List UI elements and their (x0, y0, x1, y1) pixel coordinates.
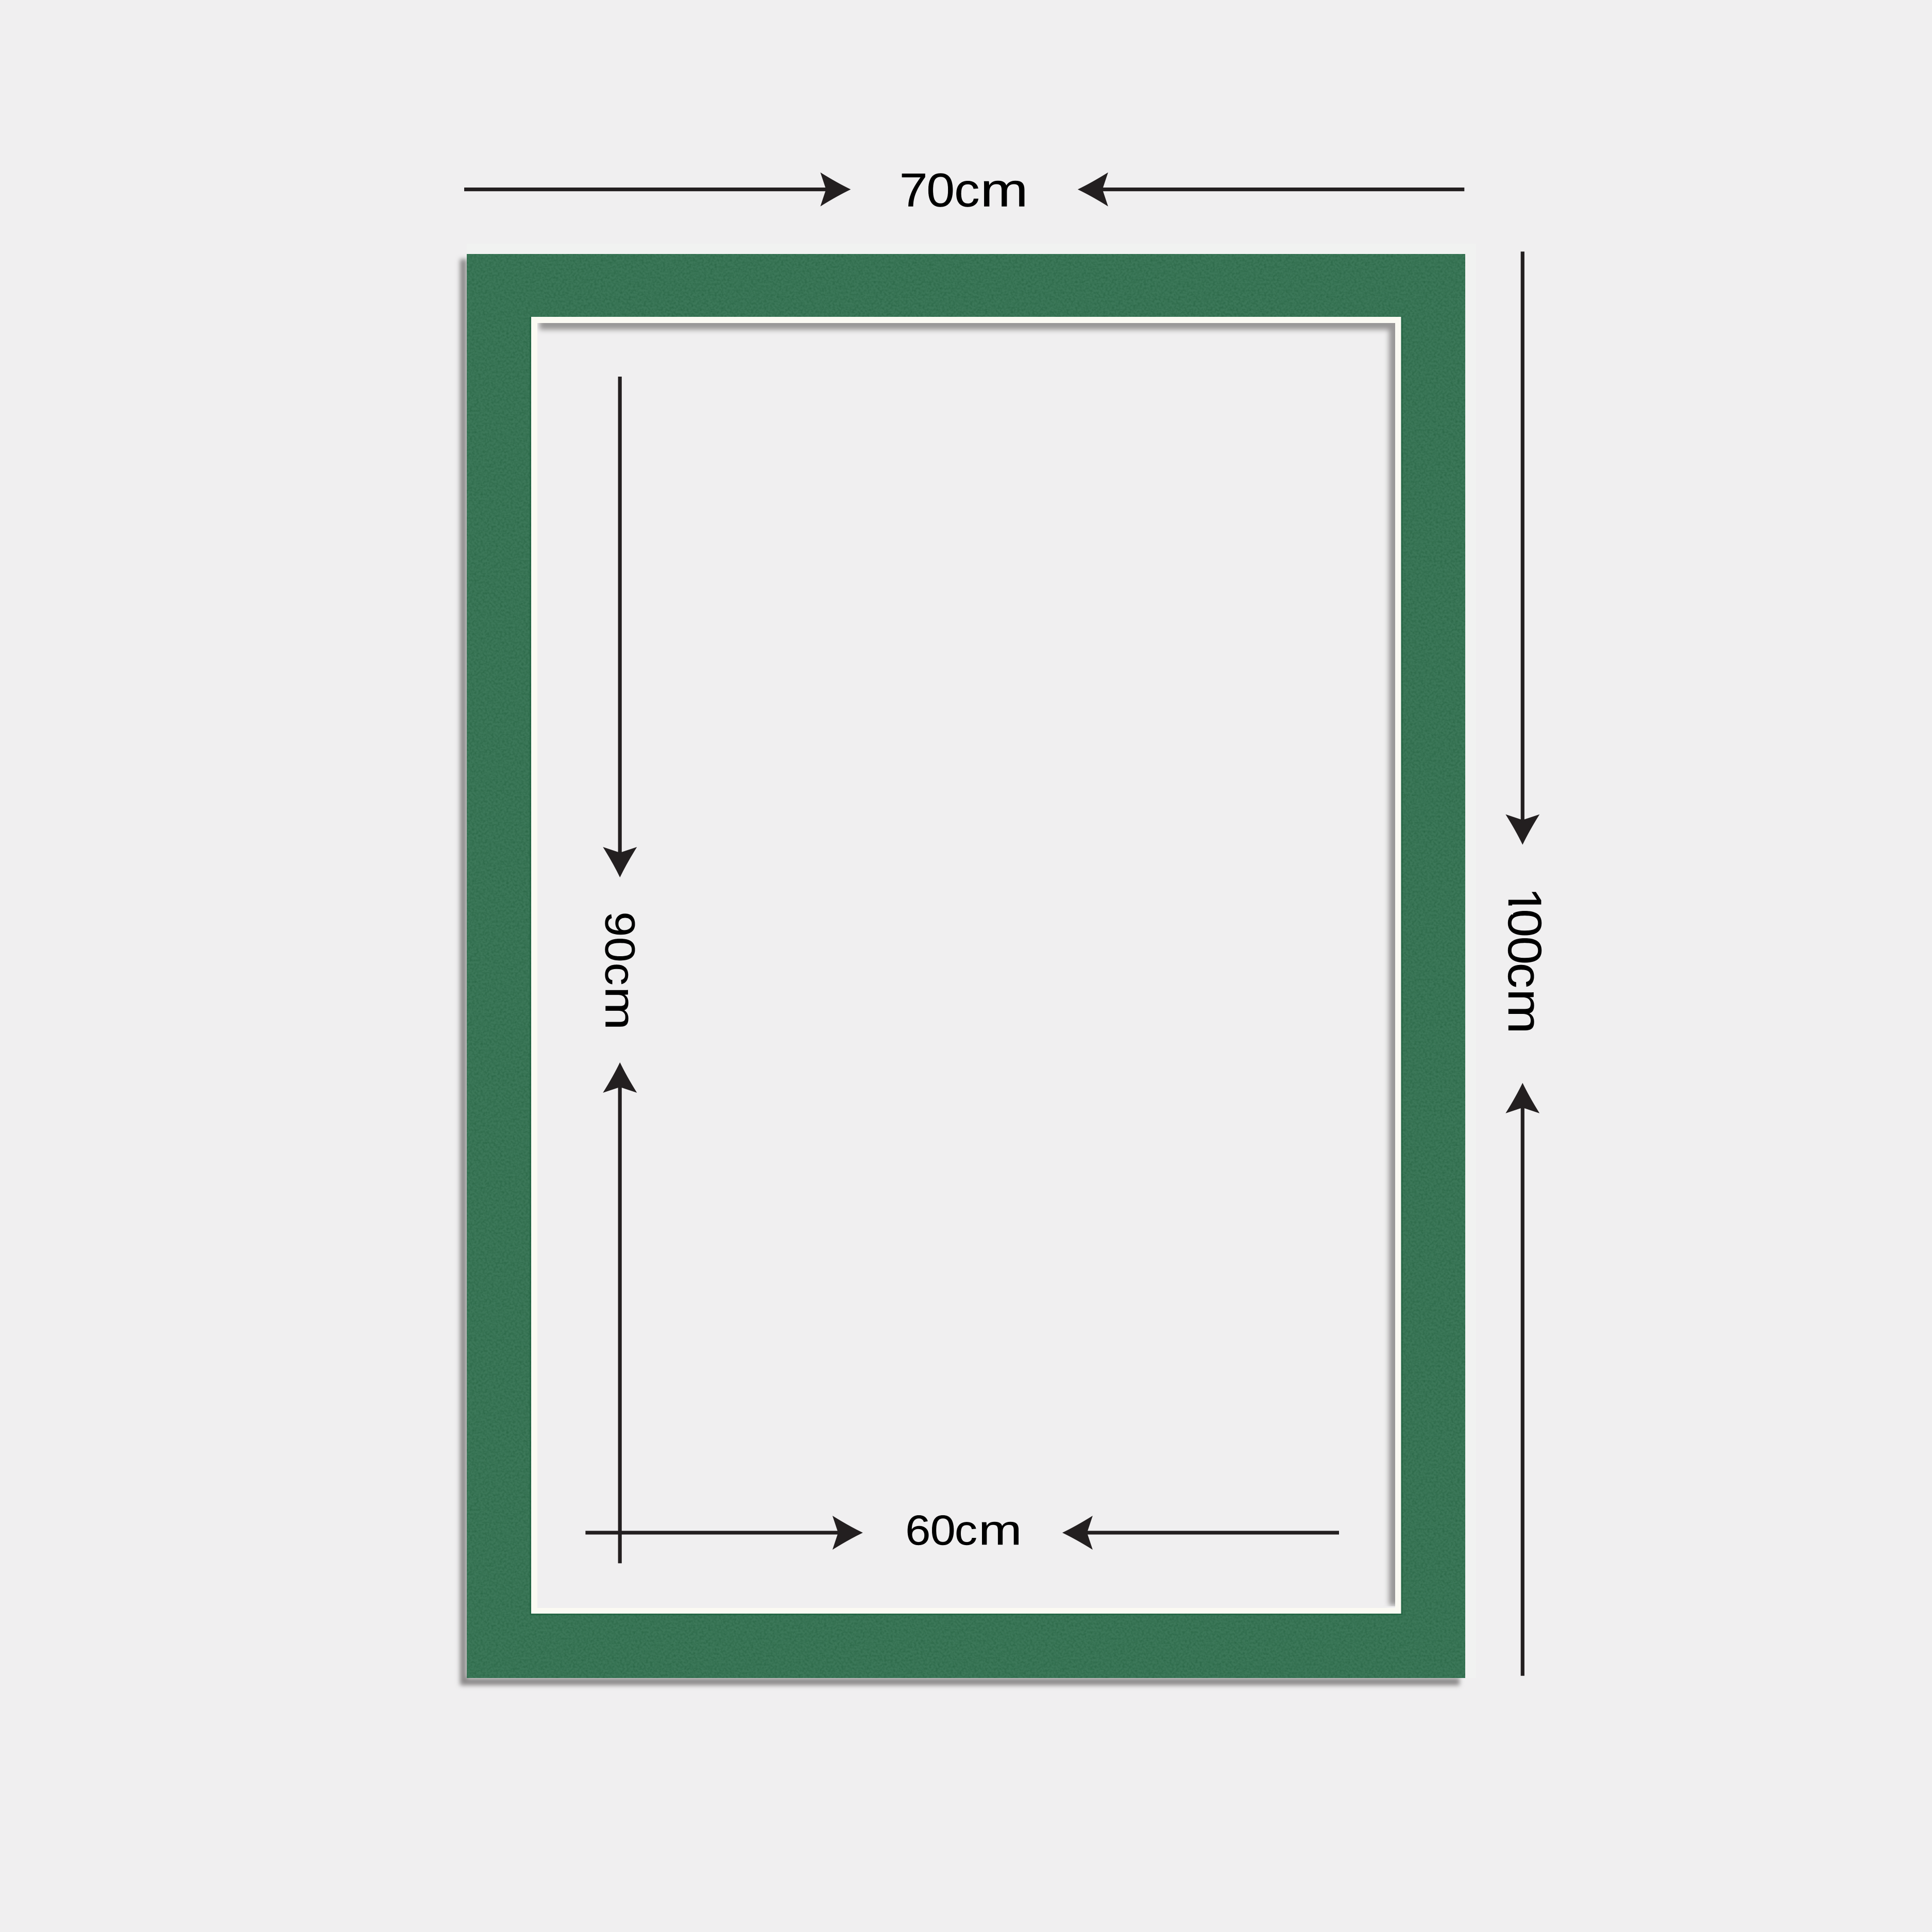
dimension: outer width 70cm (464, 164, 1464, 217)
arrow: pointing down to 100cm (1505, 815, 1539, 845)
label: 100cm: m (1498, 989, 1551, 1034)
arrow: pointing up to 100cm (1505, 1083, 1539, 1113)
numeral foot mask (1506, 888, 1513, 914)
arrow: pointing right to 60cm (833, 1516, 863, 1550)
panel: green mat board frame (460, 244, 1476, 1685)
arrow: pointing left to 70cm (1078, 173, 1108, 207)
arrow: pointing down to 90cm (603, 847, 637, 877)
arrow: pointing up to 90cm (603, 1062, 637, 1093)
line: right of 60cm (1085, 1531, 1339, 1534)
dimension: outer height 100cm (1498, 251, 1551, 1676)
line: right of 70cm (1100, 188, 1464, 191)
white bevel around opening (531, 317, 1401, 1614)
label: 90cm: m (597, 987, 644, 1030)
label: 60cm: 60c (905, 1506, 977, 1553)
green mat surface (467, 254, 1465, 1678)
dimension: opening height 90cm (597, 377, 644, 1563)
line: left of 70cm (464, 188, 827, 191)
label: 100cm: 100c (1498, 887, 1551, 988)
line: above 90cm (618, 377, 622, 855)
label: 70cm: m (980, 164, 1028, 217)
label: 70cm: 70c (900, 164, 980, 217)
mat cut edge shading (531, 317, 1402, 1615)
dimension: opening width 60cm (585, 1506, 1339, 1553)
line: below 90cm (618, 1086, 622, 1563)
inner opening shadow (539, 317, 1401, 1605)
frame highlight halo (467, 244, 1476, 1678)
arrow: pointing left to 60cm (1062, 1516, 1093, 1550)
line: above 100cm (1521, 251, 1524, 821)
line: below 100cm (1521, 1107, 1524, 1676)
arrow: pointing right to 70cm (820, 173, 851, 207)
line: left of 60cm (585, 1531, 840, 1534)
frame drop shadow (460, 259, 1460, 1685)
label: 90cm: 90c (597, 911, 644, 986)
label: 60cm: m (978, 1506, 1022, 1553)
